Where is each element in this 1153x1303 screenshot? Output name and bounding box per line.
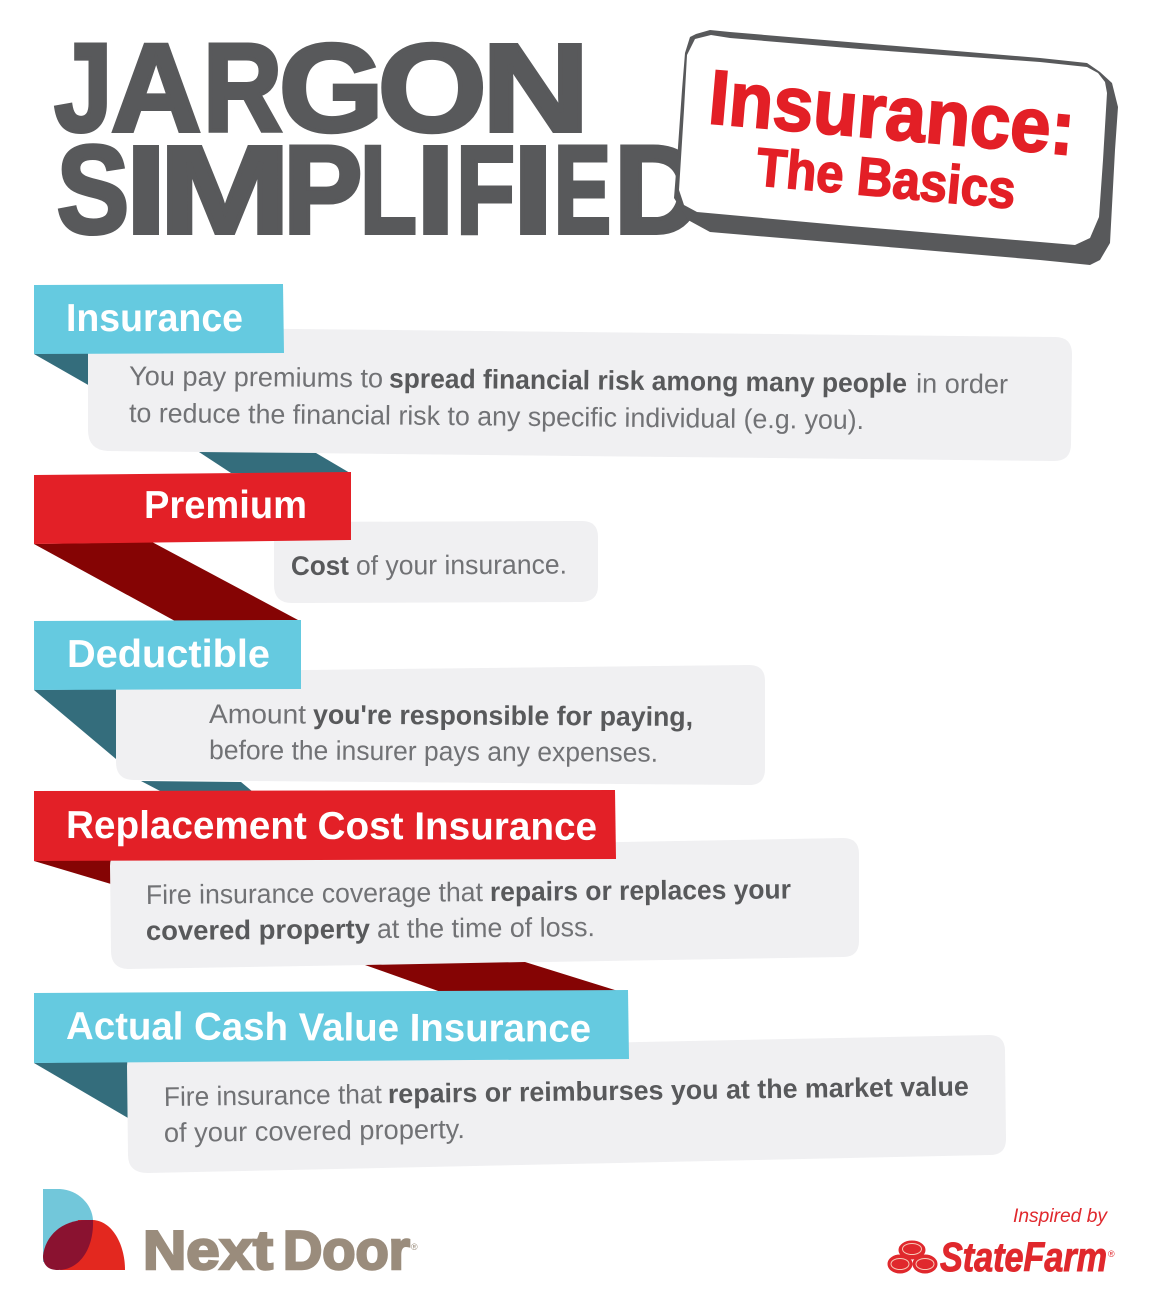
text: insurance definition: in order — [916, 369, 1008, 399]
registered mark: ® — [411, 1242, 418, 1252]
title: F — [456, 121, 515, 260]
title: L — [360, 121, 417, 260]
title: D — [614, 121, 703, 260]
ribbon fold: actual cash value — [34, 1061, 128, 1118]
ribbon fold: insurance — [34, 352, 90, 386]
title: O — [378, 19, 487, 158]
wordmark: State Farm: StateFarm — [940, 1234, 1107, 1280]
wordmark: Next Door: Door — [283, 1219, 410, 1281]
text: insurance definition: spread financial risk among many people — [389, 363, 907, 398]
text: deductible definition: before the insurer pays any expenses. — [209, 735, 658, 768]
badge: Insurance, The Basics — [674, 30, 1118, 265]
card: replacement cost definition — [110, 838, 859, 969]
panel: actual cash value insurance — [34, 990, 1006, 1173]
text: premium definition: Cost — [291, 551, 349, 581]
title: S — [57, 121, 129, 260]
label: Actual Cash Value Insurance: Actual Cash Value Insurance — [66, 1005, 591, 1051]
text: insurance definition: You pay premiums to — [129, 361, 383, 393]
wordmark: Next Door — [143, 1219, 410, 1281]
card: premium definition — [274, 521, 598, 603]
title: G — [279, 19, 384, 158]
text: replacement cost definition: Fire insurance coverage that — [146, 877, 484, 910]
ribbon fold: replacement cost — [34, 859, 111, 884]
panel: replacement cost insurance — [34, 790, 859, 992]
text: replacement cost definition: covered property — [146, 914, 370, 946]
panel: premium — [34, 472, 598, 621]
title — [54, 19, 703, 260]
card: actual cash value definition — [127, 1035, 1006, 1173]
text: premium definition: of your insurance. — [356, 550, 567, 581]
logo: Next Door — [43, 1189, 418, 1281]
ribbon fold: deductible to replacement — [141, 781, 253, 792]
title: M — [159, 121, 291, 260]
panel: insurance — [34, 284, 1072, 473]
text: actual cash value definition: repairs or reimburses you at the market value — [388, 1071, 969, 1109]
title: J — [54, 19, 112, 158]
wordmark: Next Door: Next — [143, 1219, 273, 1281]
text: deductible definition: Amount — [209, 699, 307, 730]
label: Deductible — [34, 620, 301, 690]
label: Insurance — [34, 284, 284, 354]
label: Premium — [34, 472, 351, 544]
icon: State Farm ovals — [888, 1241, 937, 1273]
title: I — [126, 121, 166, 260]
text: replacement cost definition: at the time of loss. — [377, 912, 595, 944]
badge: Insurance, The Basics: The Basics — [754, 137, 1018, 221]
text: deductible definition: you're responsible for paying, — [313, 700, 693, 732]
text: inspired by: Inspired by — [1013, 1206, 1109, 1227]
title: P — [283, 121, 362, 260]
registered mark: ® — [1108, 1249, 1115, 1259]
text: insurance definition: to reduce the financial risk to any specific individual (e.g. you). — [129, 398, 864, 435]
text: replacement cost definition — [146, 874, 792, 946]
ribbon fold: deductible — [34, 689, 116, 759]
card: insurance definition — [88, 327, 1072, 461]
label: Replacement Cost Insurance: Replacement Cost Insurance — [66, 804, 597, 849]
label: Insurance: Insurance — [66, 297, 243, 340]
ribbon fold: replacement to actual cash value — [365, 962, 618, 992]
label: Actual Cash Value Insurance — [34, 990, 629, 1063]
label: Replacement Cost Insurance — [34, 790, 616, 861]
title: I — [513, 121, 554, 260]
badge: Insurance, The Basics: Insurance: — [706, 54, 1079, 172]
text: deductible definition — [209, 699, 693, 768]
ribbon fold: insurance to premium — [199, 452, 350, 473]
text: actual cash value definition: Fire insurance that — [164, 1079, 383, 1112]
text: replacement cost definition: repairs or replaces your — [490, 874, 792, 907]
text: actual cash value definition: of your covered property. — [164, 1114, 465, 1148]
title: E — [554, 121, 611, 260]
title: R — [203, 19, 282, 158]
card: deductible definition — [116, 665, 765, 785]
icon: Next Door mark — [43, 1189, 125, 1270]
label: Deductible: Deductible — [67, 633, 270, 676]
title: N — [482, 19, 590, 158]
ribbon fold: premium — [34, 542, 298, 621]
text: insurance definition — [129, 361, 1008, 435]
text: actual cash value definition — [164, 1071, 969, 1148]
title: I — [416, 121, 455, 260]
logo: Inspired by State Farm — [888, 1206, 1115, 1280]
title: A — [111, 19, 201, 158]
panel: deductible — [34, 620, 765, 792]
label: Premium: Premium — [144, 484, 307, 527]
